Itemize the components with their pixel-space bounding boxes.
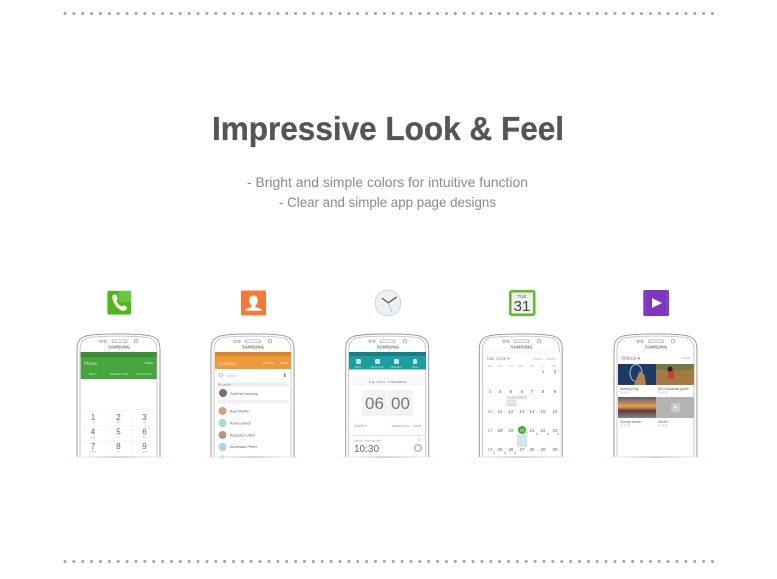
phone: dialer: JKL <box>117 437 121 439</box>
phone: contacts: Contacts <box>218 361 237 366</box>
phone: calendar: 13 <box>519 409 525 414</box>
phone: calendar: 12 <box>508 409 514 414</box>
phone: dialer: MNO <box>142 437 147 439</box>
phone: dialer: RECENT TAB <box>110 372 128 376</box>
phone: dialer: 4 <box>91 428 96 436</box>
phone: videos: 00:12:00 <box>620 424 630 428</box>
subtitle <box>247 174 528 210</box>
phone: calendar: 29 <box>540 447 546 452</box>
icon: contacts <box>241 290 266 316</box>
phone: videos: Bill's baseball game <box>658 387 689 391</box>
icon: clock <box>375 290 401 316</box>
phone: clock: 06 <box>365 394 384 413</box>
phone: dialer: 7 <box>91 442 96 451</box>
phone: contacts: UPDATE <box>262 361 274 365</box>
phone: clock: 00 <box>391 394 410 413</box>
phone: dialer: 3 <box>142 413 147 422</box>
top dotted border <box>65 12 714 15</box>
bottom dotted border <box>65 560 714 563</box>
phone: calendar <box>466 334 578 458</box>
phone: contacts: Aancy Buch <box>230 420 251 426</box>
phone: dialer: DEF <box>142 422 147 424</box>
phone: dialer: VM <box>91 422 95 424</box>
phone: calendar: 27 <box>519 447 525 452</box>
subtitle: - Bright and simple colors for intuitive function <box>247 174 528 190</box>
phone: dialer: 1 <box>91 413 96 422</box>
phone: dialer: 9 <box>142 442 147 451</box>
phone: calendar: 3 <box>489 389 492 394</box>
phone: calendar: 6 <box>521 389 524 394</box>
phone: calendar: Sat <box>552 365 556 368</box>
phone: contacts: MORE <box>280 361 288 365</box>
phone: clock: SAMSUNG <box>377 344 399 350</box>
icon: phone <box>106 290 132 316</box>
phone: calendar: 30 <box>552 447 558 452</box>
phone: dialer: GHI <box>91 437 95 439</box>
phone: calendar: Sun <box>488 365 493 368</box>
phone: contacts: Aaspard Ulliot <box>230 432 256 438</box>
phone: videos: 01:30:00 <box>620 392 630 394</box>
phone: calendar: TODAY <box>533 357 543 361</box>
phone: clock: Sound ▾ <box>354 424 367 428</box>
phone: calendar: 1 <box>542 369 545 374</box>
phone: calendar: SAMSUNG <box>510 344 533 350</box>
phone: calendar: Mon <box>498 365 503 368</box>
phone: calendar: 25 <box>497 447 503 452</box>
icon: calendar <box>510 291 534 315</box>
phone: calendar: 2 <box>554 369 557 374</box>
icon: calendar: 31 <box>514 298 530 315</box>
phone: dialer: 6 <box>142 428 147 436</box>
phone: calendar: Thu <box>530 365 535 368</box>
phone: dialer <box>64 334 174 458</box>
phone: clock: Timer <box>412 366 418 369</box>
phone: clock: Sound: Morning call <box>354 438 381 442</box>
phone: dialer: SAMSUNG <box>108 344 130 350</box>
icon: video <box>643 290 669 316</box>
icon: calendar: TUE <box>518 294 526 299</box>
phone: calendar: 4 <box>499 389 502 394</box>
phone: clock: Alarm <box>355 366 361 369</box>
phone: calendar: 28 <box>529 447 535 452</box>
phone: dialer: Phone <box>84 361 98 366</box>
phone: calendar: 16 <box>552 409 558 414</box>
phone: calendar: Tue <box>509 365 514 368</box>
phone: contacts: Serena Humpty <box>230 391 258 396</box>
phone: videos <box>600 334 712 458</box>
phone: calendar: 7 <box>531 389 534 394</box>
phone: dialer: 2 <box>116 413 121 422</box>
phone: videos: SAMSUNG <box>645 344 667 350</box>
phone: contacts <box>198 334 308 459</box>
phone: videos: MORE <box>682 356 690 360</box>
phone: videos: Sunset beach <box>620 420 641 424</box>
phone: videos: Winter <box>658 420 669 424</box>
phone: videos: 00:45:20 <box>658 392 668 394</box>
phone: dialer: KEYS <box>89 372 97 376</box>
phone: dialer: CONTACTS <box>136 372 152 376</box>
phone: clock: World Clock <box>370 366 384 369</box>
phone: calendar: 21 <box>529 428 535 433</box>
phone: calendar: 20 <box>520 428 525 432</box>
phone: calendar: 17 <box>487 428 493 433</box>
phone: clock: Stopwatch <box>390 366 402 369</box>
phone: calendar: 14 <box>529 409 535 414</box>
phone: calendar: 5 <box>510 389 513 394</box>
phone: calendar: 19 <box>508 428 514 433</box>
subtitle: - Clear and simple app page designs <box>279 194 496 210</box>
phone: calendar: 8 <box>542 389 545 394</box>
phone: calendar: 24 <box>487 447 493 452</box>
phone: clock: TUE, 3 NOV · TOMORROW <box>369 380 407 384</box>
phone: dialer: ABC <box>116 421 121 424</box>
phone: calendar: Wed <box>518 365 524 368</box>
phone: calendar: 15 <box>540 409 546 414</box>
phone: calendar: 23 <box>552 428 558 433</box>
phone: contacts: Abraham Peter <box>230 444 258 449</box>
phone: clock: × <box>418 437 421 442</box>
phone: contacts: My profile <box>218 382 231 386</box>
phone: calendar: 22 <box>540 428 546 433</box>
phone: calendar: Fri <box>542 365 545 368</box>
phone: dialer: PQRS <box>90 452 97 454</box>
phone: dialer: 5 <box>116 428 121 436</box>
phone: contacts: Aan Martin <box>230 408 249 414</box>
phone: dialer: 8 <box>116 442 121 451</box>
phone: calendar: Mar 2015 ▾ <box>487 356 510 361</box>
phone: videos: 00:10:00 <box>658 424 668 428</box>
phone: calendar: MORE <box>546 357 556 361</box>
phone: videos: Videos ▾ <box>621 356 641 362</box>
phone: clock: REPEATING <box>392 424 410 428</box>
phone: contacts: SAMSUNG <box>242 344 264 350</box>
phone: calendar: 11 <box>498 409 503 414</box>
phone: clock <box>332 334 442 458</box>
phone: dialer: TUV <box>116 452 121 454</box>
phone: dialer: MORE <box>145 361 153 365</box>
phone: dialer: WXYZ <box>141 452 148 454</box>
phone: contacts: Search <box>226 374 237 378</box>
phone: clock: SAVE <box>413 424 421 428</box>
phone: calendar: 26 <box>508 447 514 452</box>
phone: videos: Waiting ring <box>620 387 638 391</box>
phone: calendar: 18 <box>497 428 503 433</box>
phone: calendar: 9 <box>554 389 557 394</box>
title: Impressive Look & Feel <box>212 110 564 147</box>
phone: calendar: 10 <box>487 409 493 414</box>
phone: clock: 10:30 <box>354 444 379 455</box>
